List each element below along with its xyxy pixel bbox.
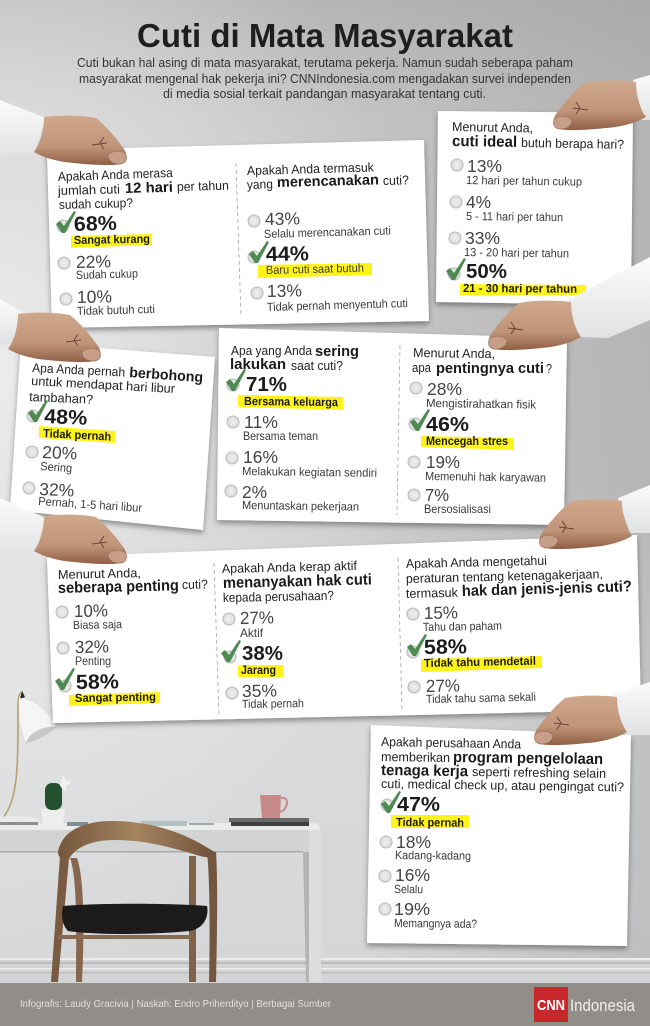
answer: 71% [226,369,343,410]
question: jumlah cuti: 12 hari [125,180,173,197]
answer: 44% [248,241,372,278]
question: berbohong: Apa Anda pernah [32,360,125,380]
answer: 33%: 33% [465,228,500,248]
answer: 20%: Sering [40,459,73,475]
question: berbohong [29,360,204,407]
question: jumlah cuti: jumlah cuti [57,181,120,198]
answer: 16% [226,447,377,480]
question: jumlah cuti: per tahun [177,178,229,194]
question: pentingnya cuti: Menurut Anda, [413,345,495,361]
answer: 28%: Mengistirahatkan fisik [426,396,536,412]
answer: 2% [225,482,359,514]
answer: 16%: Melakukan kegiatan sendiri [242,464,377,480]
panel: paper 2 [436,111,633,305]
answer: 15%: Tahu dan paham [423,619,502,634]
icon: hand lower right [539,485,650,549]
answer: 38% [221,640,283,677]
answer: 4%: 4% [466,192,491,212]
question: program pengelolaan: seperti refreshing selain [472,764,606,781]
answer: 68%: Sangat kurang [74,232,150,247]
question: hak dan jenis-jenis cuti: hak dan jenis-jenis cuti? [462,578,632,600]
answer: 58%: Sangat penting [75,690,156,705]
question: merencanakan: cuti? [383,172,409,188]
answer: 4%: 5 - 11 hari per tahun [466,209,563,224]
answer: 68%: 68% [74,212,117,236]
answer: 28% [410,379,536,412]
answer: 19%: Memenuhi hak karyawan [425,469,546,485]
answer: 11%: 11% [244,412,278,432]
answer: 48%: 48% [44,405,88,430]
answer: 27%: 27% [426,675,460,696]
answer: 50% [446,258,586,296]
question: program pengelolaan: memberikan [381,749,450,765]
question: menanyakan hak cuti: menanyakan hak cuti [223,571,372,592]
answer: 10%: 10% [77,286,112,307]
answer: 20% [26,442,78,475]
answer: 11%: Bersama teman [243,429,318,443]
answer: 18% [380,832,471,863]
question: program pengelolaan [381,734,624,794]
answer: 43%: Selalu merencanakan cuti [264,223,391,241]
question: cuti ideal: Menurut Anda, [452,119,533,135]
answer: 10%: 10% [74,600,108,621]
answer: 38%: Jarang [241,663,276,677]
answer: 58%: 58% [424,635,467,659]
panel: paper 3 [10,342,215,530]
answer: 44%: 44% [266,242,309,266]
answer: 22% [58,251,138,282]
desk [0,823,321,982]
intro paragraph [77,56,573,101]
question: menanyakan hak cuti [222,558,372,605]
question: seberapa penting: Menurut Anda, [58,565,141,582]
answer: 58%: 58% [76,670,119,694]
answer: 10%: Tidak butuh cuti [77,302,155,318]
answer: 48% [27,400,115,444]
question: sering lakukan: lakukan [230,357,286,373]
answer: 35%: Tidak pernah [242,696,304,711]
answer: 47%: Tidak pernah [396,815,464,830]
question: menanyakan hak cuti: Apakah Anda kerap aktif [222,558,357,576]
answer: 13%: 13% [267,280,302,301]
answer: 7% [408,485,491,516]
question: sering lakukan: sering [315,344,359,360]
answer: 58% [407,634,542,672]
question: jumlah cuti: Apakah Anda merasa [58,165,174,184]
icon: hand lower left [0,498,127,564]
answer: 33%: 13 - 20 hari per tahun [464,245,569,260]
answer: 19% [408,452,546,485]
question: pentingnya cuti: apa [412,360,432,375]
question: sering lakukan [230,343,359,373]
answer: 27% [408,675,536,706]
answer: 46%: 46% [426,413,469,436]
answer: 38%: 38% [242,642,283,665]
question: pentingnya cuti [412,345,552,377]
answer: 10% [60,286,155,318]
icon: hand top right [553,75,650,130]
answer: 27%: 27% [240,607,274,628]
footer credits: Infografis: Laudy Gracivia | Naskah: Endro Priherdityo | Berbagai Sumber [20,998,331,1010]
question: program pengelolaan: tenaga kerja [381,762,469,780]
icon: hand top left [0,100,127,165]
answer: 71%: Bersama keluarga [244,394,339,409]
question: cuti ideal: cuti ideal [452,133,517,151]
panel: paper 5 [47,535,641,723]
answer: 33% [449,228,569,260]
answer: 18%: 18% [396,832,431,852]
icon: hand bottom right [534,682,650,745]
question: hak dan jenis-jenis cuti: peraturan tentang ketenagakerjaan, [406,566,603,586]
question: sering lakukan: Apa yang Anda [231,343,313,358]
footer bar [0,983,650,1026]
question: pentingnya cuti: pentingnya cuti [436,361,544,377]
answer: 46% [409,409,514,450]
question: merencanakan: merencanakan [277,172,379,191]
icon: hand middle left [0,299,101,362]
answer: 58% [55,668,160,706]
question: program pengelolaan: cuti, medical check up, atau pengingat cuti? [381,776,624,794]
question: seberapa penting: seberapa penting [58,577,179,597]
answer: 16% [379,865,430,896]
answer: 15% [407,602,502,634]
answer: 18%: Kadang-kadang [395,848,471,863]
answer: 19% [379,899,477,931]
answer: 7%: 7% [425,485,449,505]
chair [51,821,217,982]
answer: 35%: 35% [242,681,277,701]
answer: 15%: 15% [424,602,458,623]
answer: 19%: Memangnya ada? [394,916,477,931]
answer: 16%: 16% [395,865,430,885]
answer: 68% [56,211,152,248]
question: menanyakan hak cuti: kepada perusahaan? [223,588,334,605]
question: hak dan jenis-jenis cuti: termasuk [406,585,459,601]
answer: 32%: Penting [75,654,111,668]
panel: paper 1 [47,140,429,328]
question: pentingnya cuti: ? [546,361,552,376]
answer: 2%: 2% [242,482,267,502]
logo: CNN Indonesia [534,987,635,1022]
answer: 50%: 50% [466,260,507,283]
answer: 19%: 19% [426,452,460,472]
logo: CNN Indonesia: CNN [537,997,565,1014]
answer: 58%: Tidak tahu mendetail [424,654,536,670]
answer: 44%: Baru cuti saat butuh [266,261,364,277]
answer: 35% [226,681,304,711]
answer: 13%: 13% [467,156,502,176]
answer: 32%: 32% [39,479,75,501]
question: jumlah cuti [57,165,229,212]
question: berbohong: berbohong [129,365,204,386]
answer: 10% [56,600,122,632]
title: Cuti di Mata Masyarakat [137,17,513,54]
answer: 27%: Tidak tahu sama sekali [426,690,536,706]
answer: 32% [23,479,143,515]
answer: 71%: 71% [246,373,287,396]
plant [41,775,72,825]
answer: 43% [248,208,391,241]
answer: 20%: 20% [42,442,78,464]
question: berbohong: untuk mendapat hari libur [31,373,176,396]
answer: 32%: Pernah, 1-5 hari libur [38,494,143,515]
logo: CNN Indonesia: Indonesia [570,996,635,1015]
baseboard [0,958,650,983]
answer: 7%: Bersosialisasi [424,502,491,516]
question: seberapa penting [58,565,208,597]
answer: 46%: Mencegah stres [426,434,508,448]
answer: 32% [57,636,111,668]
question: merencanakan: yang [247,176,273,192]
answer: 43%: 43% [265,208,300,229]
answer: 16%: 16% [243,447,278,467]
answer: 48%: Tidak pernah [43,426,111,444]
answer: 10%: Biasa saja [73,617,122,632]
answer: 22%: Sudah cukup [76,266,138,282]
answer: 2%: Menuntaskan pekerjaan [242,498,359,514]
answer: 27%: Aktif [240,626,264,640]
answer: 19%: 19% [394,899,430,919]
question: program pengelolaan: program pengelolaan [453,749,603,768]
question: program pengelolaan: Apakah perusahaan Anda [381,734,522,751]
answer: 28%: 28% [427,379,462,399]
answer: 13%: Tidak pernah menyentuh cuti [267,296,408,314]
question: merencanakan: Apakah Anda termasuk [247,159,375,178]
answer: 47%: 47% [397,793,440,816]
icon: hand middle right [488,257,650,350]
answer: 22%: 22% [76,251,111,272]
answer: 4% [450,192,563,224]
question: seberapa penting: cuti? [182,576,208,592]
panel: paper 6 [367,725,631,946]
answer: 13%: 12 hari per tahun cukup [466,173,583,189]
desk items: mug and books [67,795,309,826]
question: jumlah cuti: sudah cukup? [59,195,133,212]
lamp [0,691,57,826]
intro paragraph: di media sosial terkait pandangan masyarakat tentang cuti. [163,87,486,101]
question: berbohong: tambahan? [29,389,93,407]
intro paragraph: Cuti bukan hal asing di mata masyarakat, terutama pekerja. Namun sudah seberapa paham [77,56,573,70]
question: hak dan jenis-jenis cuti [406,553,632,601]
answer: 32%: 32% [75,636,109,657]
question: merencanakan [247,159,409,192]
question: cuti ideal: butuh berapa hari? [521,135,624,152]
intro paragraph: masyarakat mengenal hak pekerja ini? CNNIndonesia.com mengadakan survei independen [79,72,571,86]
answer: 16%: Selalu [394,882,423,896]
answer: 47% [381,791,469,830]
question: cuti ideal [452,119,624,152]
answer: 11% [227,412,318,443]
answer: 27% [223,607,274,640]
panel: paper 4 [217,328,567,525]
answer: 13% [451,156,583,189]
answer: 13% [251,280,408,314]
question: hak dan jenis-jenis cuti: Apakah Anda mengetahui [406,553,547,571]
question: sering lakukan: saat cuti? [291,358,343,373]
answer: 50%: 21 - 30 hari per tahun [463,281,577,296]
